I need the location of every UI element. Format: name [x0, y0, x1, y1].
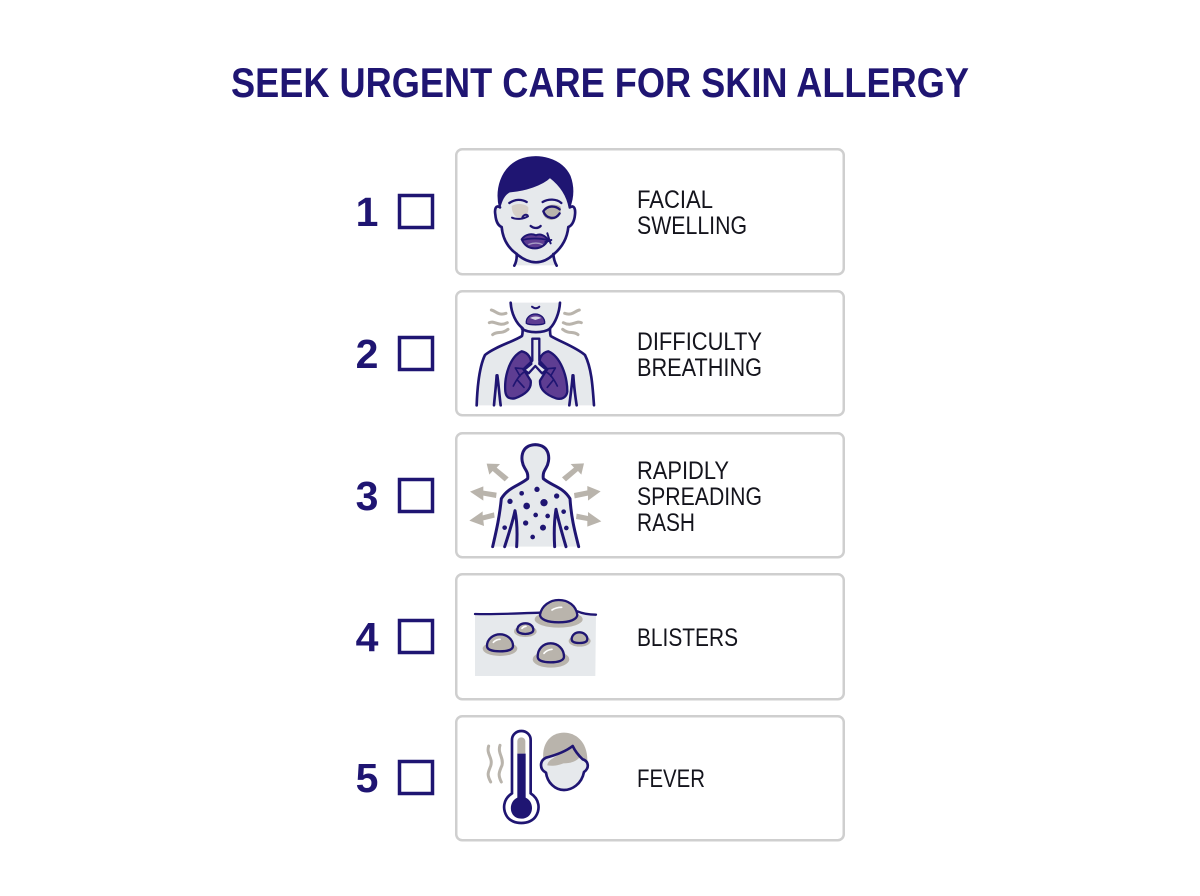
label 3: SPREADING	[637, 483, 762, 511]
spreading arrows	[469, 463, 601, 527]
card 3	[456, 433, 844, 557]
row 3: rapidly spreading rash	[356, 433, 844, 557]
checkbox 4	[400, 620, 432, 652]
number 1: 1	[356, 189, 378, 235]
icon: blisters on skin	[475, 600, 596, 676]
checkbox 2	[400, 338, 432, 370]
label 4: BLISTERS	[637, 624, 738, 652]
row 5: fever	[356, 716, 844, 840]
icon: thermometer and hot face	[488, 731, 588, 823]
label 3: RASH	[637, 509, 695, 537]
checkbox 1	[400, 196, 432, 228]
card 1	[456, 149, 844, 274]
label 1: FACIAL	[637, 186, 713, 214]
title: SEEK URGENT CARE FOR SKIN ALLERGY	[231, 59, 969, 106]
label 5: FEVER	[637, 765, 705, 793]
number 4: 4	[356, 614, 379, 660]
row 1: facial swelling	[356, 149, 844, 274]
hair	[498, 157, 573, 208]
swollen lips	[522, 234, 548, 248]
label 2: BREATHING	[637, 354, 762, 382]
puffy eyes	[512, 204, 528, 218]
lungs	[505, 351, 531, 399]
hair back	[543, 733, 587, 769]
icon: lungs and throat	[477, 303, 594, 405]
label 2: DIFFICULTY	[637, 328, 762, 356]
wavy air lines	[489, 310, 508, 335]
rash dots	[502, 487, 569, 539]
number 3: 3	[356, 473, 378, 519]
card 4	[456, 574, 844, 699]
card 5	[456, 716, 844, 840]
number 2: 2	[356, 331, 378, 377]
open mouth	[526, 314, 545, 325]
icon: swollen face	[495, 157, 575, 266]
checkbox 3	[400, 480, 432, 512]
label 3: RAPIDLY	[637, 457, 729, 485]
face	[541, 746, 588, 790]
checkbox 5	[400, 762, 432, 794]
label 1: SWELLING	[637, 212, 747, 240]
trachea	[532, 339, 539, 361]
thermometer	[504, 731, 539, 823]
card 2	[456, 291, 844, 415]
number 5: 5	[356, 755, 378, 801]
row 4: blisters	[356, 574, 844, 699]
icon: body with spreading rash	[469, 445, 601, 547]
row 2: difficulty breathing	[356, 291, 844, 415]
